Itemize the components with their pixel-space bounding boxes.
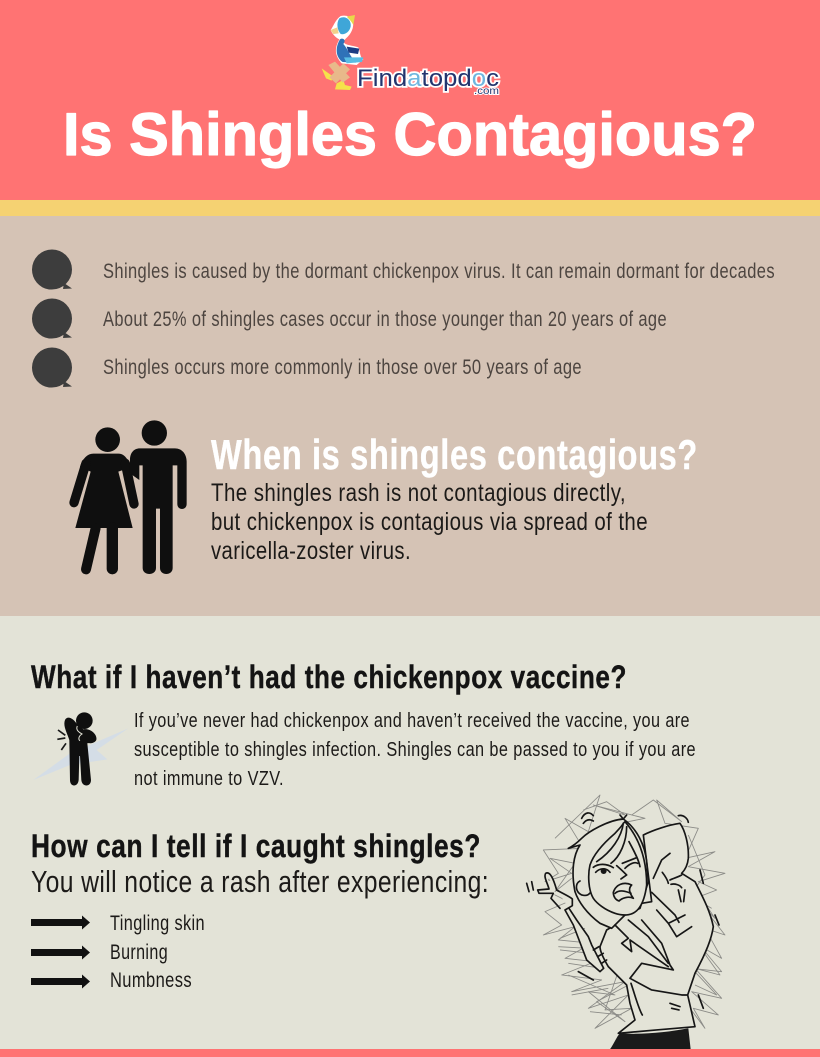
illustration: itching woman [527, 795, 725, 1049]
vaccine paragraph [134, 710, 696, 790]
explanation text: but chickenpox is contagious via spread of the [211, 508, 648, 536]
panel: header [0, 0, 820, 200]
subheading: You will notice a rash after experiencing: [31, 864, 489, 899]
woman details [527, 813, 719, 1015]
panel: facts [0, 216, 820, 616]
arrow 2 [31, 946, 90, 960]
explanation text: The shingles rash is not contagious directly, [211, 479, 626, 507]
icon: couple [74, 420, 187, 574]
icon: speech bubble 2 [32, 298, 72, 338]
icon: speech bubble 1 [32, 250, 72, 290]
panel: lower section [0, 616, 820, 1049]
icon: sick person [33, 712, 128, 785]
explanation text: varicella-zoster virus. [211, 537, 411, 565]
logo: Findatopdoc duck [322, 15, 499, 97]
woman body fills and outline [538, 819, 713, 1033]
symptoms list [31, 911, 205, 992]
arrow 1 [31, 916, 90, 930]
yellow band [0, 200, 820, 216]
heading: when is shingles contagious: When is shingles contagious? [211, 431, 698, 478]
fact 2: About 25% of shingles cases occur in those younger than 20 years of age [103, 308, 667, 331]
arrow 3 [31, 974, 90, 988]
icon: speech bubble 3 [32, 348, 72, 388]
symptom: burning: Burning [110, 940, 168, 964]
logo wordmark: .com [474, 86, 499, 97]
symptom: numbness: Numbness [110, 968, 192, 992]
bullet list [32, 250, 775, 388]
vaccine paragraph: not immune to VZV. [134, 768, 284, 790]
scribble cloud [543, 795, 725, 1028]
vaccine paragraph: If you’ve never had chickenpox and haven’t received the vaccine, you are [134, 710, 690, 732]
heading: how can I tell: How can I tell if I caught shingles? [31, 828, 481, 864]
bottom strip [0, 1049, 820, 1057]
logo wordmark: Findatopdoc [357, 65, 499, 92]
symptom: tingling skin: Tingling skin [110, 911, 205, 935]
explanation text [211, 479, 648, 565]
title: Is Shingles Contagious? [63, 101, 757, 168]
heading: vaccine question: What if I haven’t had the chickenpox vaccine? [31, 659, 627, 695]
fact 3: Shingles occurs more commonly in those over 50 years of age [103, 356, 582, 379]
vaccine paragraph: susceptible to shingles infection. Shingles can be passed to you if you are [134, 739, 696, 761]
black trousers [610, 1028, 691, 1049]
